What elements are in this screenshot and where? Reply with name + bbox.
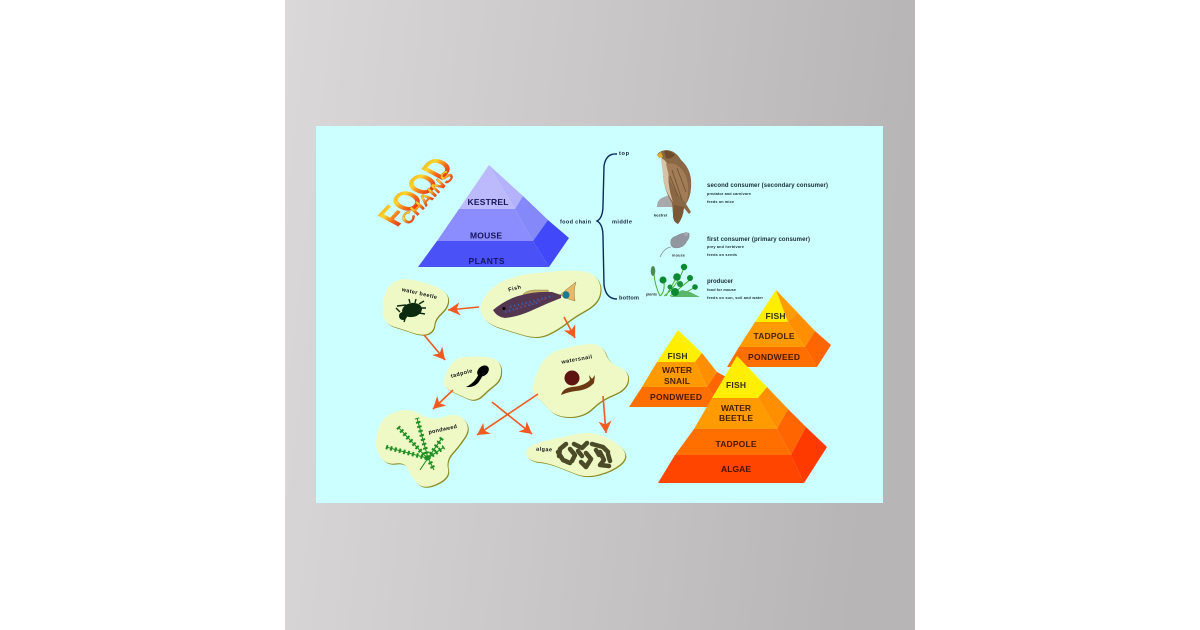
arrow: fish to water snail: [564, 317, 575, 338]
blob: algae: algae: [536, 447, 552, 453]
icon: kestrel: [654, 150, 691, 224]
text: first consumer: first consumer (primary consumer): [707, 237, 810, 243]
food web: [376, 273, 626, 487]
icon: plants: [646, 264, 700, 297]
pyramid: fish water beetle tadpole algae: BEETLE: [719, 413, 753, 423]
panel: poster sheet: [316, 126, 883, 503]
title: Food Chains: CHAINS: [399, 167, 458, 229]
arrow: water snail to algae: [603, 396, 606, 433]
pyramid: fish tadpole pondweed: PONDWEED: [748, 352, 800, 362]
text: first consumer: feeds on seeds: [707, 253, 737, 257]
blob: pondweed: pondweed: [428, 424, 458, 436]
blob: fish: Fish: [508, 284, 522, 294]
pyramid: fish water beetle tadpole algae: ALGAE: [721, 464, 751, 474]
pyramid: kestrel mouse plants: PLANTS: [468, 256, 505, 266]
blob: pondweed: [376, 410, 468, 487]
text: producer: food for mouse: [707, 288, 736, 292]
pyramid: fish tadpole pondweed: FISH: [766, 311, 786, 321]
blob: water snail: watersnail: [560, 354, 593, 366]
icon: mouse: mouse: [672, 254, 685, 258]
icon: plants: plants: [646, 292, 657, 296]
blob: fish: [482, 273, 599, 335]
text: second consumer: [707, 183, 828, 204]
icon: kestrel: kestrel: [654, 214, 667, 218]
pyramid: fish water beetle tadpole algae: WATER: [721, 403, 751, 413]
poster background: [285, 0, 915, 630]
arrow: water beetle to tadpole: [424, 335, 445, 360]
blob: water beetle: water beetle: [400, 287, 437, 301]
icon: mouse: [660, 232, 689, 258]
text: second consumer: predator and carnivore: [707, 192, 751, 196]
pyramid: kestrel mouse plants: [418, 165, 569, 267]
label: top: top: [619, 151, 630, 157]
arrow: tadpole to algae: [492, 402, 532, 434]
pyramid: fish tadpole pondweed: [727, 290, 831, 367]
pyramid: fish water snail pondweed: PONDWEED: [650, 392, 702, 402]
text: producer: producer: [707, 279, 734, 285]
pyramid: fish water snail pondweed: SNAIL: [664, 376, 690, 386]
blob: water beetle: [385, 281, 446, 333]
label: middle: middle: [612, 220, 632, 226]
arrow: water snail to pondweed: [477, 394, 538, 435]
blob: tadpole: [446, 358, 499, 398]
pyramid: fish water snail pondweed: FISH: [668, 351, 688, 361]
pyramid: kestrel mouse plants: KESTREL: [468, 197, 508, 207]
arrow: tadpole to pondweed: [433, 390, 453, 409]
text: first consumer: prey and herbivore: [707, 245, 744, 249]
pyramid: fish tadpole pondweed: TADPOLE: [754, 331, 795, 341]
pyramid: fish water snail pondweed: [629, 330, 728, 407]
text: second consumer: second consumer (secondary consumer): [707, 183, 828, 189]
pyramid: fish water snail pondweed: WATER: [662, 365, 692, 375]
pyramid: fish water beetle tadpole algae: FISH: [726, 380, 746, 390]
text: producer: [707, 279, 764, 300]
label: bottom: bottom: [619, 296, 639, 302]
pyramid: fish water beetle tadpole algae: TADPOLE: [716, 439, 757, 449]
text: producer: feeds on sun, soil and water: [707, 296, 764, 300]
text: first consumer: [707, 237, 810, 257]
brace: food chain levels: [597, 154, 617, 299]
blob: algae: [526, 433, 625, 476]
pyramid: fish water beetle tadpole algae: [658, 356, 827, 483]
pyramid: kestrel mouse plants: MOUSE: [470, 230, 502, 240]
blob: water snail: [534, 346, 626, 415]
arrow: fish to water beetle: [448, 307, 479, 310]
text: second consumer: feeds on mice: [707, 200, 734, 204]
blob: tadpole: tadpole: [450, 368, 473, 380]
label: food chain: food chain: [560, 220, 592, 226]
title: Food Chains: FOOD: [371, 152, 462, 232]
